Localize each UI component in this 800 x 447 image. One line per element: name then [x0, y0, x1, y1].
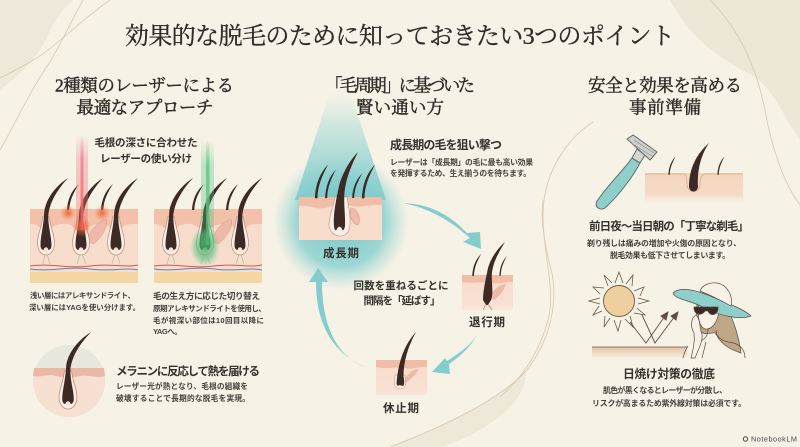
icon: razor [596, 135, 657, 209]
text: switch by hair growth: 原期アレキサンドライトを使用し、 [153, 303, 266, 313]
text: target growth phase: 成長期の毛を狙い撃つ [390, 137, 502, 152]
text: extend intervals [354, 279, 448, 307]
heading: preparation [588, 76, 742, 118]
heading: laser approach [55, 76, 234, 118]
heading: laser approach: 2種類のレーザーによる [55, 76, 234, 96]
text: alexandrite and YAG: 深い層にはYAGを使い分けます。 [29, 303, 140, 312]
glow: anagen highlight [273, 92, 409, 290]
laser beam: green [201, 140, 214, 245]
arrow: anagen to catagen [403, 203, 481, 249]
heading: preparation: 安全と効果を高める [588, 76, 742, 96]
text: sun protection [592, 367, 746, 408]
text: alexandrite and YAG [29, 291, 140, 312]
text: switch by hair growth: 毛が視深い部位は10回目以降に [153, 315, 264, 325]
title: 効果的な脱毛のために知っておきたい3つのポイント [125, 23, 675, 50]
text: target growth phase: レーザーは「成長期」の毛に最も高い効果 [390, 157, 533, 167]
label: telogen: 休止期 [383, 401, 419, 415]
text: switch by hair growth: YAGへ。 [153, 327, 182, 336]
text: sun protection: 日焼け対策の徹底 [623, 367, 715, 381]
text: shaving: 前日夜～当日朝の「丁寧な剃毛」 [589, 219, 749, 233]
text: extend intervals: 間隔を「延ばす」 [364, 294, 440, 307]
text: extend intervals: 回数を重ねるごとに [354, 279, 448, 292]
skin diagram: YAG laser [154, 178, 262, 283]
label: catagen: 退行期 [469, 315, 505, 329]
text: target growth phase [390, 137, 533, 178]
subheading: laser use by depth [94, 136, 198, 165]
text: shaving: 剃り残しは痛みの増加や火傷の原因となり、 [587, 238, 741, 248]
panel: hair cycle [273, 76, 533, 415]
icon: shaved skin [645, 143, 743, 204]
icon: sun [589, 272, 649, 331]
panel: laser approach [29, 76, 266, 417]
logo: NotebookLM: NotebookLM [751, 434, 797, 444]
text: alexandrite and YAG: 浅い層にはアレキサンドライト、 [30, 291, 135, 300]
icon: ground [592, 347, 687, 358]
icon: melanin hair circle [33, 332, 105, 417]
text: sun protection: 肌色が黒くなるとレーザーが分散し、 [603, 385, 727, 395]
heading: hair cycle: 「毛周期」に基づいた [325, 76, 475, 96]
stage: telogen [376, 332, 427, 395]
text: melanin: 破壊することで長期的な脱毛を実現。 [116, 393, 250, 403]
text: melanin: レーザー光が熱となり、毛根の組織を [116, 381, 248, 391]
heading: hair cycle [325, 76, 475, 118]
text: shaving: 脱毛効果も低下させてしまいます。 [610, 250, 730, 260]
subheading: laser use by depth: レーザーの使い分け [100, 152, 192, 165]
icon: reflected UV arrows [630, 312, 678, 343]
text: target growth phase: を発揮するため、生え揃うのを待ちます。 [390, 168, 531, 178]
skin diagram: alexandrite laser [30, 178, 138, 283]
text: switch by hair growth: 毛の生え方に応じた切り替え [153, 290, 260, 301]
heading: hair cycle: 賢い通い方 [356, 98, 444, 118]
text: melanin: メラニンに反応して熱を届ける [116, 364, 260, 378]
text: shaving [587, 219, 749, 260]
label: anagen: 成長期 [323, 246, 359, 260]
arrow: telogen to anagen [309, 268, 365, 367]
stage: anagen [299, 152, 382, 240]
stage: catagen [462, 242, 513, 310]
text: switch by hair growth [153, 290, 266, 336]
arrow: catagen to telogen [432, 335, 477, 374]
text: sun protection: リスクが高まるため紫外線対策は必須です。 [592, 398, 746, 408]
panel: preparation [587, 76, 751, 408]
subheading: laser use by depth: 毛根の深さに合わせた [94, 136, 198, 149]
heading: laser approach: 最適なアプローチ [76, 98, 214, 118]
laser beam: red [76, 135, 88, 230]
heading: preparation: 事前準備 [629, 98, 701, 118]
text: melanin [116, 364, 260, 403]
icon: woman with sun hat [673, 283, 751, 358]
